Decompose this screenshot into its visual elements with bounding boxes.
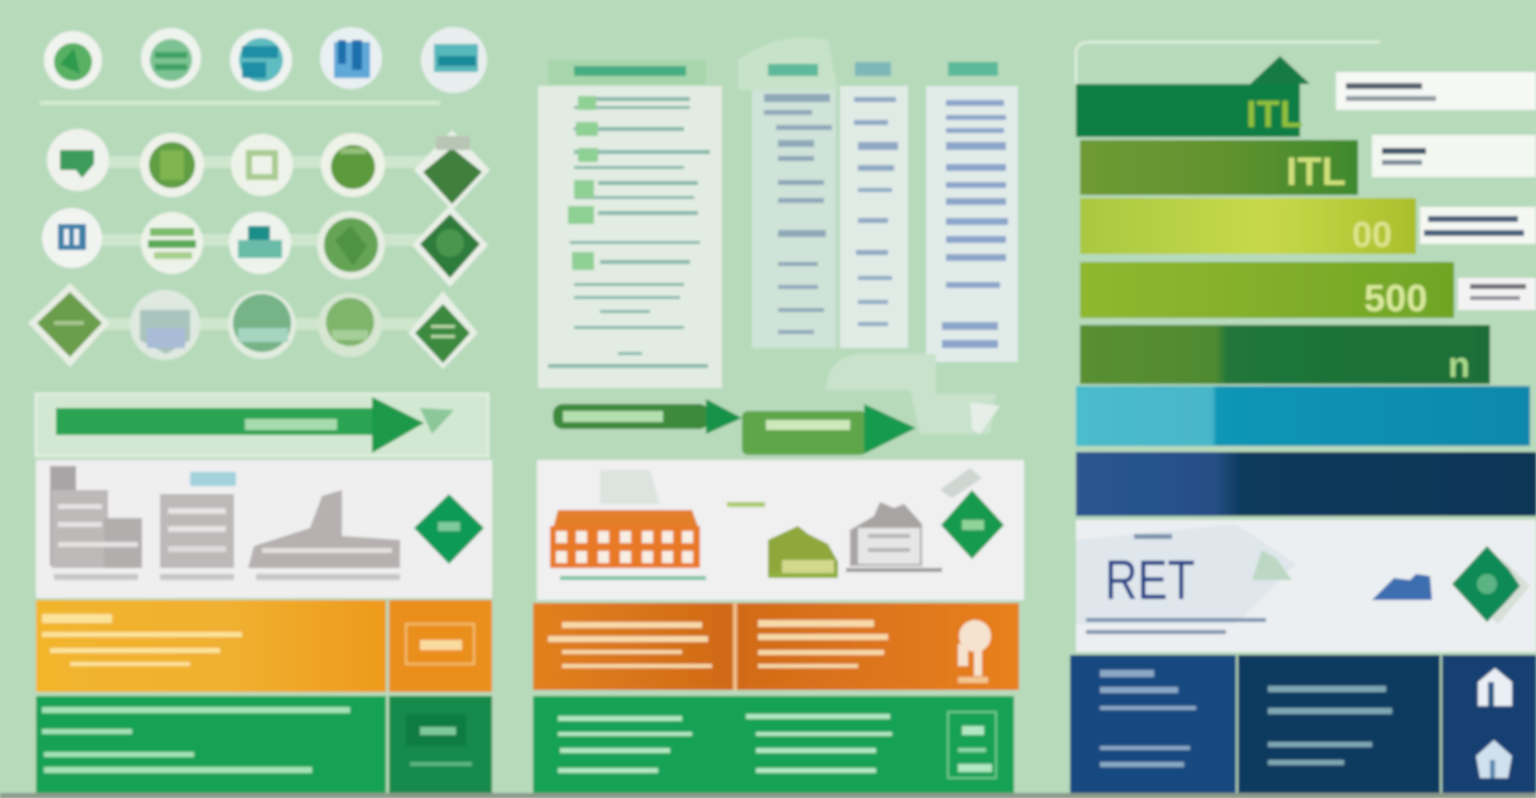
panel: middle document: [538, 60, 722, 388]
bar 4: 500: [1364, 278, 1427, 320]
icon: plant: [1252, 550, 1292, 580]
panel: icon network: [28, 27, 490, 369]
connector lines: [70, 162, 452, 324]
label 3: [1420, 207, 1536, 244]
text lines: [558, 714, 892, 773]
panel: left orange: [36, 600, 492, 692]
bar 3: 00: [1352, 214, 1392, 255]
label 2: [1372, 135, 1536, 177]
icon: white flag: [970, 402, 1000, 434]
icon: green diamond: [1452, 546, 1530, 624]
panel: right staircase chart: [1076, 42, 1536, 516]
arrow label: [245, 419, 337, 430]
callout box: [948, 712, 996, 778]
bar 2: [1080, 140, 1358, 195]
outline: [1076, 42, 1380, 84]
arrow: up: [1250, 56, 1310, 84]
list lines: [548, 97, 710, 368]
bar 7: [1076, 452, 1536, 516]
bar 3: [1080, 198, 1416, 255]
icon row 2: [47, 129, 490, 210]
label 1: [1336, 72, 1536, 110]
panel: middle buildings: [537, 460, 1024, 600]
divider line: [40, 101, 440, 105]
icon: grey factory: [846, 502, 942, 572]
icon row 1: [44, 27, 487, 93]
text lines: [548, 620, 888, 668]
bottom strip: [0, 793, 1536, 798]
icon: building: [1478, 668, 1512, 706]
bar 5: n: [1448, 344, 1470, 385]
panel: left arrow band: [36, 394, 488, 456]
icon: house: [1476, 740, 1512, 778]
icon: orange school: [550, 510, 706, 580]
bar 5: [1080, 325, 1490, 385]
icon row 3: [42, 205, 488, 287]
label: [727, 502, 765, 507]
list icons: [568, 96, 598, 270]
column 2: [840, 62, 908, 348]
column tab 1: [738, 38, 838, 90]
mark: [1372, 574, 1432, 600]
text lines: [1100, 670, 1196, 767]
arrow: green left: [56, 397, 454, 453]
icon row 4: [28, 283, 478, 369]
text lines: [1086, 534, 1266, 634]
text lines: [42, 614, 242, 666]
bar 1: [1076, 84, 1303, 137]
column 3: [926, 62, 1018, 362]
panel: right navy: [1070, 655, 1536, 793]
panel: right logo: [1076, 520, 1536, 652]
panel: middle columns: [738, 38, 1018, 434]
panel: middle orange: [533, 603, 1019, 690]
icon: grey factory: [248, 490, 400, 580]
heading bar: [548, 60, 706, 85]
icon: tree: [958, 620, 991, 683]
bar 1: ITL: [1246, 94, 1303, 136]
icon: grey building 2: [160, 472, 236, 580]
bar 4: [1080, 262, 1454, 320]
text lines: [42, 707, 350, 773]
logo text: RET: [1105, 548, 1195, 611]
icon: green house: [768, 526, 838, 578]
callout box: [406, 714, 472, 766]
panel: left green: [36, 696, 492, 793]
bar 2: ITL: [1286, 150, 1346, 194]
column 1: [752, 64, 836, 348]
arrow: middle green box: [742, 404, 916, 455]
icon: green diamond: [414, 494, 484, 564]
panel: middle green: [533, 696, 1014, 793]
callout box: [406, 624, 474, 664]
callout tail: [826, 354, 996, 434]
panel: left buildings: [36, 460, 492, 598]
bar 6: [1076, 386, 1530, 446]
arrow: middle dark green: [553, 399, 742, 434]
icon: grey building 1: [50, 466, 142, 580]
icon: green diamond: [940, 468, 1004, 559]
label 4: [1458, 278, 1536, 310]
